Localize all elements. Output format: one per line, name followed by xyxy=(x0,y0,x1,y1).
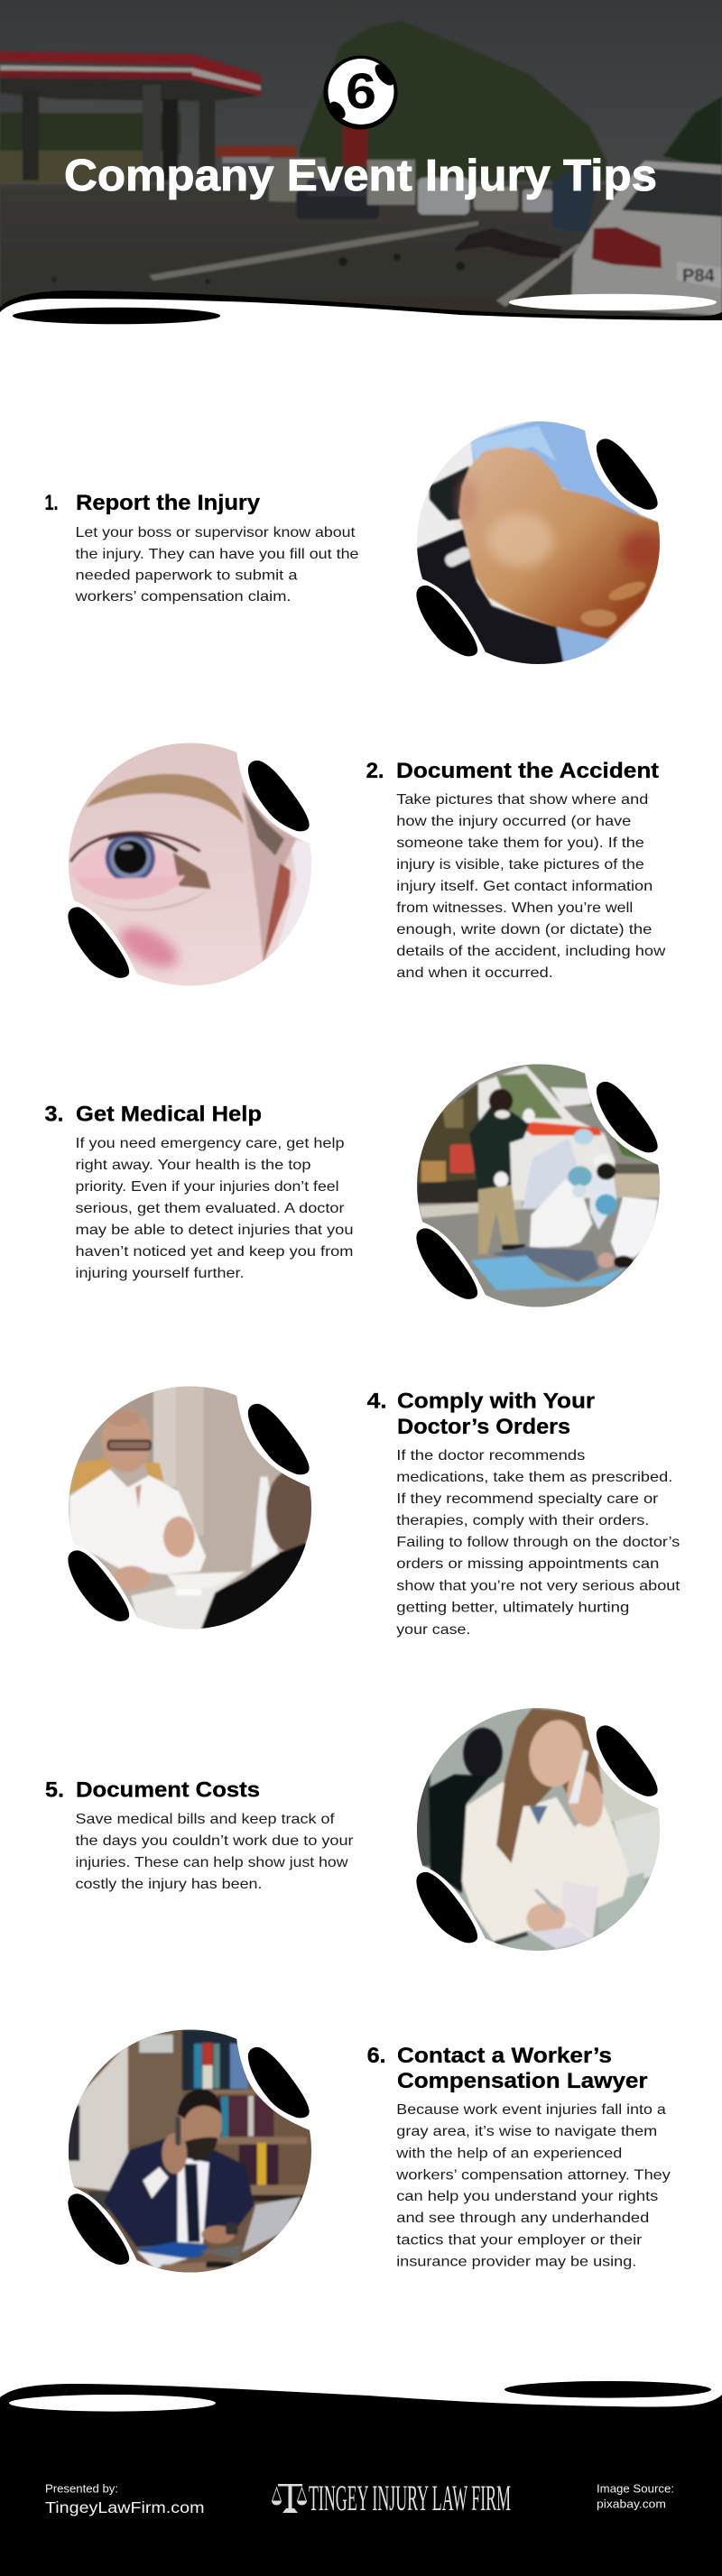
tip 4 body: show that you’re not very serious about xyxy=(396,1579,680,1593)
tip 5 body: costly the injury has been. xyxy=(76,1877,262,1892)
tip 1 heading: 1. xyxy=(45,491,58,515)
tip 3 body: may be able to detect injuries that you xyxy=(76,1223,354,1238)
tip 4 body: If they recommend specialty care or xyxy=(396,1491,658,1507)
tip 6 body: and see through any underhanded xyxy=(396,2211,649,2226)
badge with number 6 xyxy=(323,56,397,130)
tip 4 body xyxy=(396,1448,680,1638)
tip 5 heading: 5. xyxy=(45,1777,64,1803)
tip 5 text xyxy=(45,1777,354,1892)
tip 2 body: and when it occurred. xyxy=(396,965,553,981)
tip 4 body: If the doctor recommends xyxy=(396,1448,585,1463)
tip 6 body: tactics that your employer or their xyxy=(396,2232,642,2248)
tip 4 body: orders or missing appointments can xyxy=(396,1556,659,1572)
tip 3 heading: 3. xyxy=(45,1102,63,1126)
tip 6 heading: Contact a Worker’s xyxy=(397,2044,612,2068)
tip 2 body: injury itself. Get contact information xyxy=(396,879,653,894)
blob cut-outs xyxy=(384,1694,682,1965)
tip 6 body: with the help of an experienced xyxy=(395,2146,622,2162)
tip 4 body: your case. xyxy=(396,1622,470,1638)
tip 2 body: someone take them for you). If the xyxy=(396,836,644,851)
footer: image source xyxy=(597,2483,674,2510)
tip 6 body xyxy=(395,2102,671,2270)
tip 6 body: gray area, it’s wise to navigate them xyxy=(396,2124,657,2139)
tip 2 body: how the injury occurred (or have xyxy=(396,814,632,829)
footer: presented by: TingeyLawFirm.com xyxy=(45,2498,205,2516)
tip 2 body: details of the accident, including how xyxy=(396,944,666,959)
footer white ellipse accent xyxy=(9,2395,216,2412)
footer: firm logo xyxy=(272,2478,511,2518)
tip 4 heading: Comply with Your xyxy=(397,1390,595,1414)
tip 3 body xyxy=(76,1136,354,1281)
tip 4 heading xyxy=(367,1390,595,1439)
icon: scales of justice xyxy=(272,2484,307,2513)
badge with number 6: 6 xyxy=(346,62,376,119)
tip 1 body xyxy=(74,525,359,605)
tip 4 text xyxy=(367,1390,680,1638)
tip 1 body: Let your boss or supervisor know about xyxy=(76,525,356,540)
tip 6 photo: lawyer on phone xyxy=(68,2030,311,2272)
footer: presented by: Presented by: xyxy=(45,2483,118,2496)
tip 4 body: therapies, comply with their orders. xyxy=(396,1513,649,1528)
tip 3 body: priority. Even if your injuries don’t feel xyxy=(76,1179,339,1195)
tip 5 body: the days you couldn’t work due to your xyxy=(76,1833,354,1849)
blob cut-outs xyxy=(384,408,682,679)
header wave: black band xyxy=(0,291,722,361)
tip 4 heading: 4. xyxy=(367,1390,387,1414)
tip 3 photo: medical team and ambulance xyxy=(416,1065,660,1306)
tip 2 heading: Document the Accident xyxy=(396,759,659,783)
tip 3 text xyxy=(45,1102,354,1281)
tip 6 heading: Compensation Lawyer xyxy=(397,2069,648,2093)
header banner: crash scene photo: P84 xyxy=(682,266,715,286)
tip 1 heading: Report the Injury xyxy=(76,491,261,515)
tip 3 body: If you need emergency care, get help xyxy=(76,1136,345,1151)
tip 2 body: injury is visible, take pictures of the xyxy=(396,857,644,873)
tip 3 body: injuring yourself further. xyxy=(76,1266,244,1281)
title: Company Event Injury Tips xyxy=(64,152,657,200)
tip 5 heading: Document Costs xyxy=(76,1777,260,1803)
tip 6 text xyxy=(367,2044,671,2270)
tip 6 heading xyxy=(367,2044,648,2093)
tip 2 body xyxy=(396,792,666,981)
blob cut-outs xyxy=(36,1372,334,1643)
tip 1 body: the injury. They can have you fill out the xyxy=(76,547,359,562)
blob cut-outs xyxy=(36,729,334,1000)
tip 1 body: workers’ compensation claim. xyxy=(74,589,291,605)
tip 6 body: can help you understand your rights xyxy=(396,2189,658,2204)
tip 6 body: Because work event injuries fall into a xyxy=(396,2102,666,2118)
tip 2 text xyxy=(366,759,666,981)
header black ellipse accent xyxy=(13,308,220,324)
tip 4 body: Failing to follow through on the doctor’s xyxy=(396,1535,680,1550)
footer: image source: Image Source: xyxy=(597,2483,674,2496)
tip 5 photo: woman doctor on phone xyxy=(416,1708,660,1951)
tip 1 text xyxy=(45,491,359,605)
tip 2 body: Take pictures that show where and xyxy=(396,792,648,808)
tip 2 body: enough, write down (or dictate) the xyxy=(396,922,653,937)
tip 5 body: Save medical bills and keep track of xyxy=(76,1812,335,1827)
tip 1 photo: bruised arm xyxy=(416,421,660,664)
header banner: crash scene photo xyxy=(0,0,722,343)
tip 1 body: needed paperwork to submit a xyxy=(76,568,298,583)
tip 4 photo: doctor at desk xyxy=(68,1386,311,1630)
tip 2 photo: bruised eye xyxy=(68,743,311,985)
tip 3 body: serious, get them evaluated. A doctor xyxy=(76,1201,345,1216)
footer black wave panel xyxy=(0,2384,722,2576)
tip 3 heading: Get Medical Help xyxy=(76,1102,262,1126)
footer: presented by xyxy=(45,2483,205,2516)
tip 3 body: right away. Your health is the top xyxy=(76,1158,311,1173)
footer: image source: pixabay.com xyxy=(597,2498,666,2510)
tip 5 body: injuries. These can help show just how xyxy=(76,1855,348,1870)
tip 4 heading: Doctor’s Orders xyxy=(397,1415,570,1439)
tip 4 body: getting better, ultimately hurting xyxy=(396,1601,629,1616)
tip 6 body: insurance provider may be using. xyxy=(396,2255,636,2270)
footer black ellipse accent xyxy=(504,2381,711,2398)
blob cut-outs xyxy=(36,2016,334,2286)
blob cut-outs xyxy=(384,1050,682,1321)
tip 6 body: workers’ compensation attorney. They xyxy=(395,2168,671,2184)
tip 2 heading: 2. xyxy=(366,759,384,783)
tip 3 body: haven’t noticed yet and keep you from xyxy=(76,1244,354,1260)
header white ellipse accent xyxy=(509,294,717,310)
tip 4 body: medications, take them as prescribed. xyxy=(396,1470,672,1485)
tip 2 body: from witnesses. When you’re well xyxy=(396,900,633,916)
tip 5 body xyxy=(76,1812,354,1892)
header wave: white body xyxy=(0,299,722,361)
tip 6 heading: 6. xyxy=(367,2044,386,2068)
